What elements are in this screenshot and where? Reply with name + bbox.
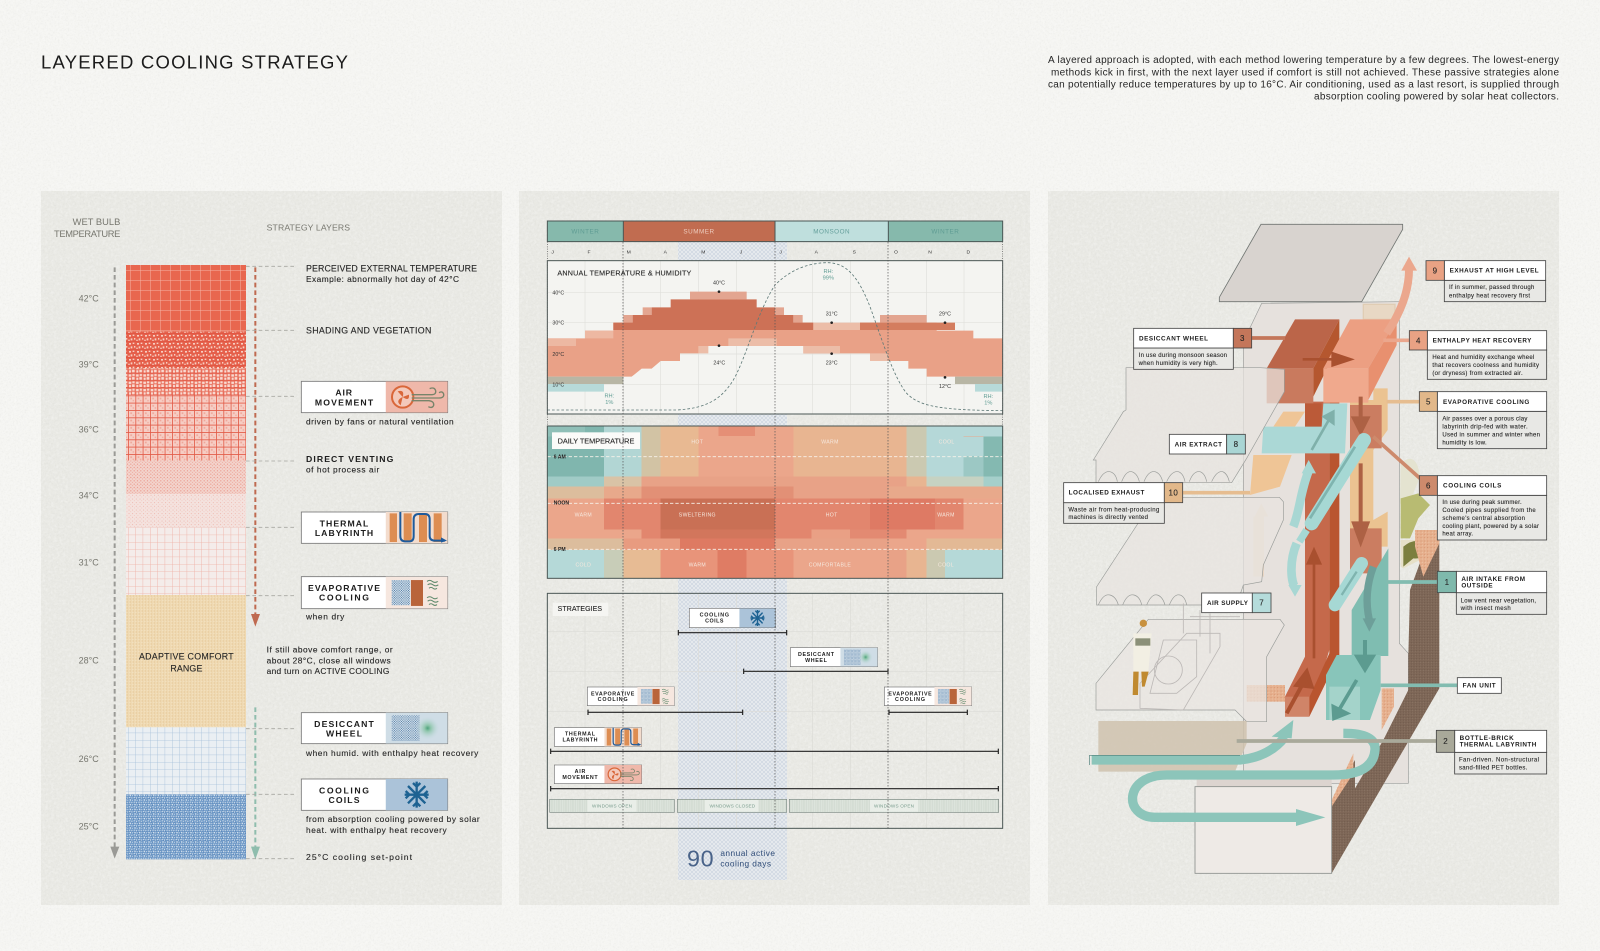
tan exhaust duct bbox=[1250, 412, 1305, 495]
label 6: cooling coils: 6 bbox=[1426, 482, 1431, 491]
strategy: cooling coils: COILS bbox=[705, 619, 724, 625]
label 10: localised exhaust: LOCALISED EXHAUST bbox=[1069, 490, 1145, 497]
chart: daily temperature heatmap: NOON bbox=[554, 501, 569, 507]
label 3: desiccant wheel: when humidity is very high. bbox=[1138, 361, 1218, 367]
season bar: WINTER bbox=[931, 228, 959, 235]
label 9: exhaust at high level: 9 bbox=[1433, 266, 1438, 275]
chart: daily temperature heatmap: COOL bbox=[939, 440, 955, 446]
windows open / closed bars: WINDOWS CLOSED bbox=[709, 804, 756, 809]
active cooling note bbox=[267, 644, 393, 676]
chart: annual temperature and humidity: 12°C bbox=[939, 384, 951, 390]
label 10: localised exhaust bbox=[1064, 483, 1183, 523]
label 9: exhaust at high level: If in summer, passed through bbox=[1449, 285, 1534, 291]
temperature scale: 26°C bbox=[79, 754, 99, 764]
label 3: desiccant wheel: In use during monsoon season bbox=[1139, 353, 1227, 359]
card: thermal labyrinth: THERMAL bbox=[320, 518, 369, 528]
strategy: evaporative cooling, autumn bbox=[884, 687, 972, 715]
month labels: S bbox=[853, 250, 857, 256]
strategy: cooling coils bbox=[678, 608, 787, 635]
chart: annual temperature and humidity: 20°C bbox=[552, 352, 564, 358]
cooling days hatched band bbox=[678, 242, 787, 880]
chart: annual temperature and humidity: RH: bbox=[983, 394, 994, 400]
soil section bbox=[1332, 540, 1439, 873]
active cooling note: and turn on ACTIVE COOLING bbox=[267, 666, 389, 676]
label 5: evaporative cooling: labyrinth drip-fed with water. bbox=[1442, 424, 1528, 430]
temperature scale: 39°C bbox=[79, 359, 99, 369]
label 2: bottle-brick thermal labyrinth bbox=[1436, 730, 1547, 774]
callout: annual active cooling days: annual active bbox=[720, 848, 775, 858]
brown extract duct bbox=[1285, 402, 1329, 717]
chart: daily temperature heatmap: DAILY TEMPERATURE bbox=[558, 436, 634, 445]
card: desiccant wheel: WHEEL bbox=[326, 728, 363, 738]
label 1: air intake from outside bbox=[1437, 571, 1547, 614]
panel: building section bbox=[1048, 191, 1559, 905]
note: desiccant wheel: when humid. with enthalpy heat recovery bbox=[305, 748, 479, 758]
chart: daily temperature heatmap: 6 PM bbox=[554, 547, 566, 553]
label 5: evaporative cooling bbox=[1419, 392, 1547, 449]
panel: annual climate and strategies bbox=[519, 191, 1030, 905]
chart: daily temperature heatmap: COMFORTABLE bbox=[809, 562, 851, 568]
chart: annual temperature and humidity: 99% bbox=[823, 275, 834, 281]
chart: annual temperature and humidity: 1% bbox=[605, 400, 613, 406]
strategy: desiccant wheel: DESICCANT bbox=[798, 652, 835, 658]
label 7: air supply: AIR SUPPLY bbox=[1207, 600, 1249, 607]
chart: annual temperature and humidity: 10°C bbox=[552, 383, 564, 389]
label 5: evaporative cooling: Used in summer and winter when bbox=[1442, 432, 1540, 438]
label 5: evaporative cooling: Air passes over a porous clay bbox=[1442, 416, 1527, 422]
label 8: air extract: 8 bbox=[1234, 440, 1239, 449]
strategy: evaporative cooling, autumn: EVAPORATIVE bbox=[888, 691, 932, 697]
chart: annual temperature and humidity: RH: bbox=[823, 269, 834, 275]
label 2: bottle-brick thermal labyrinth: BOTTLE-BRICK bbox=[1460, 735, 1514, 742]
card: desiccant wheel bbox=[301, 713, 448, 744]
plants bbox=[1400, 459, 1439, 577]
month labels: M bbox=[701, 250, 705, 256]
note: air movement: driven by fans or natural ventilation bbox=[306, 416, 454, 426]
temperature scale: 25°C bbox=[79, 822, 99, 832]
first floor bbox=[1093, 368, 1284, 483]
brick retaining layer bbox=[1247, 685, 1394, 807]
arrow: extract air bbox=[1312, 412, 1333, 450]
label 6: cooling coils: scheme's central absorption bbox=[1442, 516, 1525, 522]
chart: strategies timeline: STRATEGIES bbox=[558, 606, 602, 613]
adaptive comfort range label: RANGE bbox=[170, 663, 202, 673]
label 6: cooling coils: In use during peak summer. bbox=[1442, 500, 1522, 506]
strategy: cooling coils: COOLING bbox=[700, 613, 729, 619]
season bar: MONSOON bbox=[813, 228, 850, 235]
card: desiccant wheel: DESICCANT bbox=[314, 719, 375, 729]
note: cooling coils: heat. with enthalpy heat recovery bbox=[306, 825, 447, 835]
title: LAYERED COOLING STRATEGY bbox=[41, 52, 348, 72]
roof slab bbox=[1219, 224, 1403, 302]
adaptive comfort range label bbox=[139, 651, 234, 673]
arrow: active cooling bbox=[251, 707, 260, 859]
label 1: air intake from outside: Low vent near vegetation, bbox=[1461, 598, 1536, 604]
layer: direct venting: DIRECT VENTING bbox=[306, 454, 394, 464]
card: evaporative cooling: COOLING bbox=[319, 593, 369, 603]
label 3: desiccant wheel: 3 bbox=[1240, 334, 1245, 343]
temperature scale bbox=[79, 294, 99, 832]
strategy: air movement: MOVEMENT bbox=[562, 775, 598, 781]
chart: daily temperature heatmap: WARM bbox=[937, 512, 955, 518]
label 10: localised exhaust: machines is directly vented bbox=[1068, 515, 1148, 521]
card: cooling coils bbox=[301, 779, 448, 810]
label 6: cooling coils: COOLING COILS bbox=[1443, 483, 1502, 490]
label 7: air supply bbox=[1202, 593, 1271, 613]
intro text block: can potentially reduce temperatures by up to 16°C. Air conditioning, used as a last resort, is supplied through bbox=[1048, 80, 1559, 90]
chart: annual temperature and humidity: 1% bbox=[984, 401, 992, 407]
concrete plinth bbox=[1098, 721, 1247, 772]
second floor bbox=[1097, 497, 1283, 605]
label 9: exhaust at high level bbox=[1426, 261, 1546, 302]
label 1: air intake from outside: 1 bbox=[1445, 578, 1450, 587]
chart: daily temperature heatmap: COLD bbox=[575, 562, 591, 568]
label 4: enthalpy heat recovery: Heat and humidity exchange wheel bbox=[1432, 355, 1534, 361]
month labels: O bbox=[894, 250, 898, 256]
season bar: WINTER bbox=[571, 228, 599, 235]
month labels: M bbox=[627, 250, 631, 256]
label 3: desiccant wheel bbox=[1134, 328, 1252, 369]
season bar: SUMMER bbox=[683, 228, 715, 235]
column heading: wet bulb temperature: TEMPERATURE bbox=[54, 229, 120, 239]
column heading: strategy layers: STRATEGY LAYERS bbox=[267, 223, 350, 233]
strategy: air movement: AIR bbox=[575, 769, 585, 775]
foundation block bbox=[1195, 787, 1332, 873]
month labels bbox=[551, 250, 971, 256]
month labels: A bbox=[815, 250, 819, 256]
label 6: cooling coils: Cooled pipes supplied from the bbox=[1442, 508, 1536, 514]
layer: direct venting bbox=[306, 454, 394, 475]
chart: daily temperature heatmap: WARM bbox=[575, 512, 592, 518]
evaporative column bbox=[1350, 388, 1388, 547]
chart: daily temperature heatmap: WARM bbox=[821, 440, 839, 446]
month labels: J bbox=[551, 250, 554, 256]
callout: annual active cooling days bbox=[687, 846, 775, 872]
chart: daily temperature heatmap: SWELTERING bbox=[679, 512, 716, 518]
label 9: exhaust at high level: EXHAUST AT HIGH LEVEL bbox=[1450, 268, 1539, 275]
label 1: air intake from outside: AIR INTAKE FROM bbox=[1461, 576, 1525, 583]
air extract duct bbox=[1262, 403, 1347, 453]
label 10: localised exhaust: Waste air from heat-producing bbox=[1068, 507, 1159, 513]
column heading: wet bulb temperature bbox=[54, 217, 120, 239]
season dividers bbox=[623, 242, 888, 828]
label 5: evaporative cooling: 5 bbox=[1426, 398, 1431, 407]
label 4: enthalpy heat recovery bbox=[1409, 331, 1547, 379]
roof vent bbox=[1363, 304, 1395, 319]
card: air movement: AIR bbox=[335, 387, 353, 397]
chart: annual temperature and humidity: 31°C bbox=[826, 312, 838, 318]
layer: direct venting: of hot process air bbox=[306, 465, 380, 475]
month labels: A bbox=[664, 250, 668, 256]
panel: strategy layers bbox=[41, 191, 502, 905]
arrow: wet bulb scale bbox=[110, 267, 119, 859]
machinery bbox=[1140, 603, 1240, 710]
teal air supply curve bbox=[1291, 472, 1308, 587]
label 2: bottle-brick thermal labyrinth: Fan-driven. Non-structural bbox=[1459, 758, 1539, 764]
label 6: cooling coils: heat array. bbox=[1442, 532, 1473, 538]
card: air movement: MOVEMENT bbox=[315, 397, 374, 407]
fan unit bbox=[1326, 640, 1381, 720]
fresh air teal duct bbox=[1352, 548, 1388, 656]
chart: annual temperature and humidity: 40°C bbox=[713, 281, 725, 287]
temperature scale: 36°C bbox=[79, 424, 99, 434]
label: fan unit: FAN UNIT bbox=[1463, 683, 1496, 690]
arrow: high level exhaust bbox=[1387, 268, 1409, 333]
callout: annual active cooling days: cooling days bbox=[720, 858, 771, 868]
chart: annual temperature and humidity: 29°C bbox=[939, 311, 951, 317]
strategy: thermal labyrinth bbox=[551, 728, 998, 754]
label 1: air intake from outside: OUTSIDE bbox=[1461, 583, 1493, 590]
card: cooling coils: COILS bbox=[328, 795, 360, 805]
layer: perceived external temperature bbox=[306, 263, 477, 284]
ground floor slab bbox=[1197, 777, 1332, 787]
enthalpy wheel box bbox=[1323, 319, 1397, 403]
month labels: F bbox=[587, 250, 591, 256]
back wall bbox=[1243, 302, 1408, 783]
desiccant wheel box bbox=[1267, 319, 1339, 403]
temperature scale: 28°C bbox=[79, 655, 99, 665]
chart: annual temperature and humidity: 23°C bbox=[826, 361, 838, 367]
chart: annual temperature and humidity: 40°C bbox=[552, 291, 564, 297]
evaporative brick bbox=[1350, 405, 1382, 448]
label 2: bottle-brick thermal labyrinth: THERMAL LABYRINTH bbox=[1460, 742, 1537, 749]
strategy: desiccant wheel bbox=[744, 648, 888, 674]
chart: annual temperature and humidity: 30°C bbox=[552, 321, 564, 327]
temperature scale: 31°C bbox=[79, 558, 99, 568]
card: cooling coils: COOLING bbox=[319, 786, 369, 796]
label 8: air extract bbox=[1169, 434, 1245, 454]
card: thermal labyrinth: LABYRINTH bbox=[315, 528, 373, 538]
thermal labyrinth ducts bbox=[1089, 733, 1375, 817]
lower brick stack bbox=[1350, 528, 1382, 573]
strategy: evaporative cooling, autumn: COOLING bbox=[895, 697, 925, 703]
windows open / closed bars: WINDOWS OPEN bbox=[592, 804, 632, 809]
arrow: through enthalpy box bbox=[1303, 353, 1351, 365]
windows open / closed bars: WINDOWS OPEN bbox=[874, 804, 914, 809]
label 2: bottle-brick thermal labyrinth: sand-filled PET bottles. bbox=[1459, 765, 1528, 771]
arrow: localised exhaust rising bbox=[1253, 503, 1268, 577]
card: evaporative cooling: EVAPORATIVE bbox=[308, 583, 380, 593]
intro text block: A layered approach is adopted, with each method lowering temperature by a few degrees. The lowest-energy bbox=[1048, 55, 1559, 66]
chart: daily temperature heatmap: HOT bbox=[691, 440, 704, 446]
label 4: enthalpy heat recovery: that recovers coolness and humidity bbox=[1432, 363, 1539, 369]
strategy: evaporative cooling, spring bbox=[587, 687, 743, 715]
label 9: exhaust at high level: enthalpy heat recovery first bbox=[1449, 293, 1530, 299]
label 5: evaporative cooling: humidity is low. bbox=[1442, 440, 1487, 446]
cooling coil pipes bbox=[1299, 440, 1364, 605]
chart: daily temperature heatmap bbox=[547, 426, 1003, 578]
chart: daily temperature heatmap: COOL bbox=[938, 562, 954, 568]
label 5: evaporative cooling: EVAPORATIVE COOLING bbox=[1443, 399, 1530, 406]
arrow: passive cooling bbox=[251, 267, 260, 627]
callout: annual active cooling days: 90 bbox=[687, 846, 714, 872]
chart: daily temperature heatmap: WARM bbox=[689, 562, 706, 568]
temperature gradient column bbox=[126, 265, 246, 859]
note: cooling coils bbox=[306, 814, 480, 835]
adaptive comfort range label: ADAPTIVE COMFORT bbox=[139, 651, 234, 661]
intro text block: absorption cooling powered by solar heat collectors. bbox=[1314, 92, 1559, 102]
column heading: wet bulb temperature: WET BULB bbox=[73, 217, 120, 227]
strategy: thermal labyrinth: LABYRINTH bbox=[562, 737, 598, 743]
month labels: N bbox=[928, 250, 932, 256]
month labels: J bbox=[740, 250, 743, 256]
label 10: localised exhaust: 10 bbox=[1169, 488, 1178, 497]
month labels: D bbox=[967, 250, 971, 256]
layer: shading and vegetation: SHADING AND VEGETATION bbox=[306, 326, 431, 336]
season bar bbox=[547, 221, 1003, 242]
label 4: enthalpy heat recovery: ENTHALPY HEAT RECOVERY bbox=[1433, 338, 1532, 345]
active cooling note: about 28°C, close all windows bbox=[267, 655, 391, 665]
intro text block bbox=[1048, 55, 1559, 102]
temperature scale: 42°C bbox=[79, 294, 99, 304]
chart: annual temperature and humidity: RH: bbox=[604, 394, 615, 400]
label: fan unit bbox=[1457, 678, 1501, 693]
chart: daily temperature heatmap: 6 AM bbox=[554, 455, 566, 461]
note: cooling coils: from absorption cooling powered by solar bbox=[306, 814, 480, 824]
layer: perceived external temperature: Example: abnormally hot day of 42°C bbox=[306, 274, 459, 284]
label 7: air supply: 7 bbox=[1259, 599, 1264, 608]
arrows: evaporative flow bbox=[1354, 397, 1367, 542]
strategy: evaporative cooling, spring: COOLING bbox=[598, 697, 628, 703]
chart: annual temperature and humidity bbox=[547, 261, 1003, 414]
strategy: thermal labyrinth: THERMAL bbox=[565, 732, 596, 738]
intro text block: methods kick in first, with the next layer used if comfort is still not achieved. These passive strategies alone bbox=[1051, 68, 1559, 78]
strategy: evaporative cooling, spring: EVAPORATIVE bbox=[591, 691, 635, 697]
label 1: air intake from outside: with insect mesh bbox=[1460, 606, 1511, 612]
windows open / closed bars bbox=[550, 799, 999, 812]
card: air movement bbox=[301, 381, 448, 413]
figure: person bbox=[1133, 620, 1152, 695]
chart: annual temperature and humidity: ANNUAL TEMPERATURE & HUMIDITY bbox=[557, 270, 692, 278]
strategy: desiccant wheel: WHEEL bbox=[805, 658, 828, 664]
label 8: air extract: AIR EXTRACT bbox=[1175, 442, 1222, 449]
label 6: cooling coils bbox=[1419, 476, 1547, 540]
label 4: enthalpy heat recovery: 4 bbox=[1416, 336, 1421, 345]
chart: annual temperature and humidity: 24°C bbox=[713, 361, 725, 367]
layer: perceived external temperature: PERCEIVED EXTERNAL TEMPERATURE bbox=[306, 263, 477, 273]
temperature scale: 34°C bbox=[79, 491, 99, 501]
card: thermal labyrinth bbox=[301, 512, 448, 543]
label 2: bottle-brick thermal labyrinth: 2 bbox=[1443, 737, 1448, 746]
strategy: air movement bbox=[551, 765, 998, 791]
leader lines bbox=[1183, 338, 1457, 741]
active cooling note: If still above comfort range, or bbox=[267, 644, 393, 654]
ground floor bbox=[1096, 619, 1284, 722]
month labels: J bbox=[779, 250, 782, 256]
card: evaporative cooling bbox=[301, 577, 448, 609]
label 3: desiccant wheel: DESICCANT WHEEL bbox=[1139, 336, 1208, 343]
note: when dry: when dry bbox=[305, 612, 345, 622]
chart: daily temperature heatmap: HOT bbox=[826, 512, 838, 518]
note: set-point: 25°C cooling set-point bbox=[306, 852, 413, 862]
chart: strategies timeline bbox=[547, 593, 1003, 828]
label 6: cooling coils: cooling plant, powered by a solar bbox=[1442, 524, 1539, 530]
label 4: enthalpy heat recovery: (or dryness) from extracted air. bbox=[1432, 371, 1523, 377]
